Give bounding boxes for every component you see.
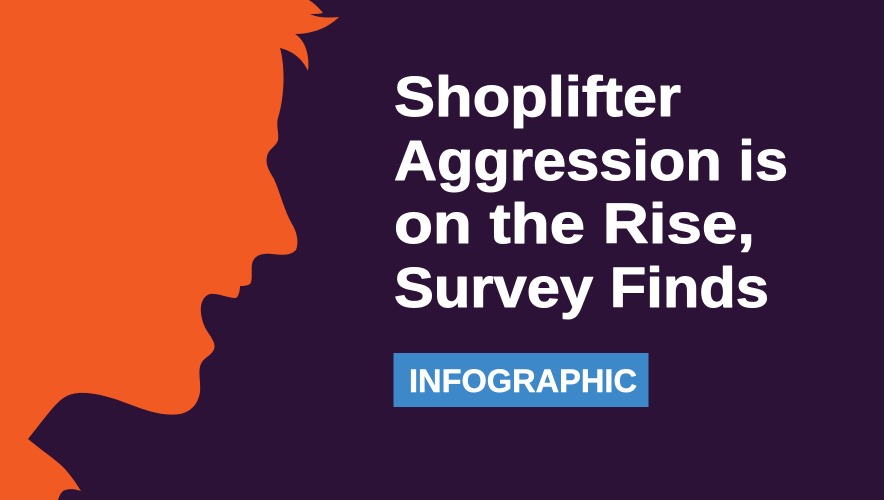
title (394, 65, 788, 320)
title: Shoplifter (394, 65, 681, 129)
title: Survey Finds (394, 256, 769, 320)
tag: infographic label (394, 353, 648, 407)
tag: infographic label: INFOGRAPHIC (409, 363, 637, 399)
title: on the Rise, (394, 192, 755, 256)
title: Aggression is (394, 129, 788, 193)
icon: orange head silhouette in profile (0, 0, 339, 500)
